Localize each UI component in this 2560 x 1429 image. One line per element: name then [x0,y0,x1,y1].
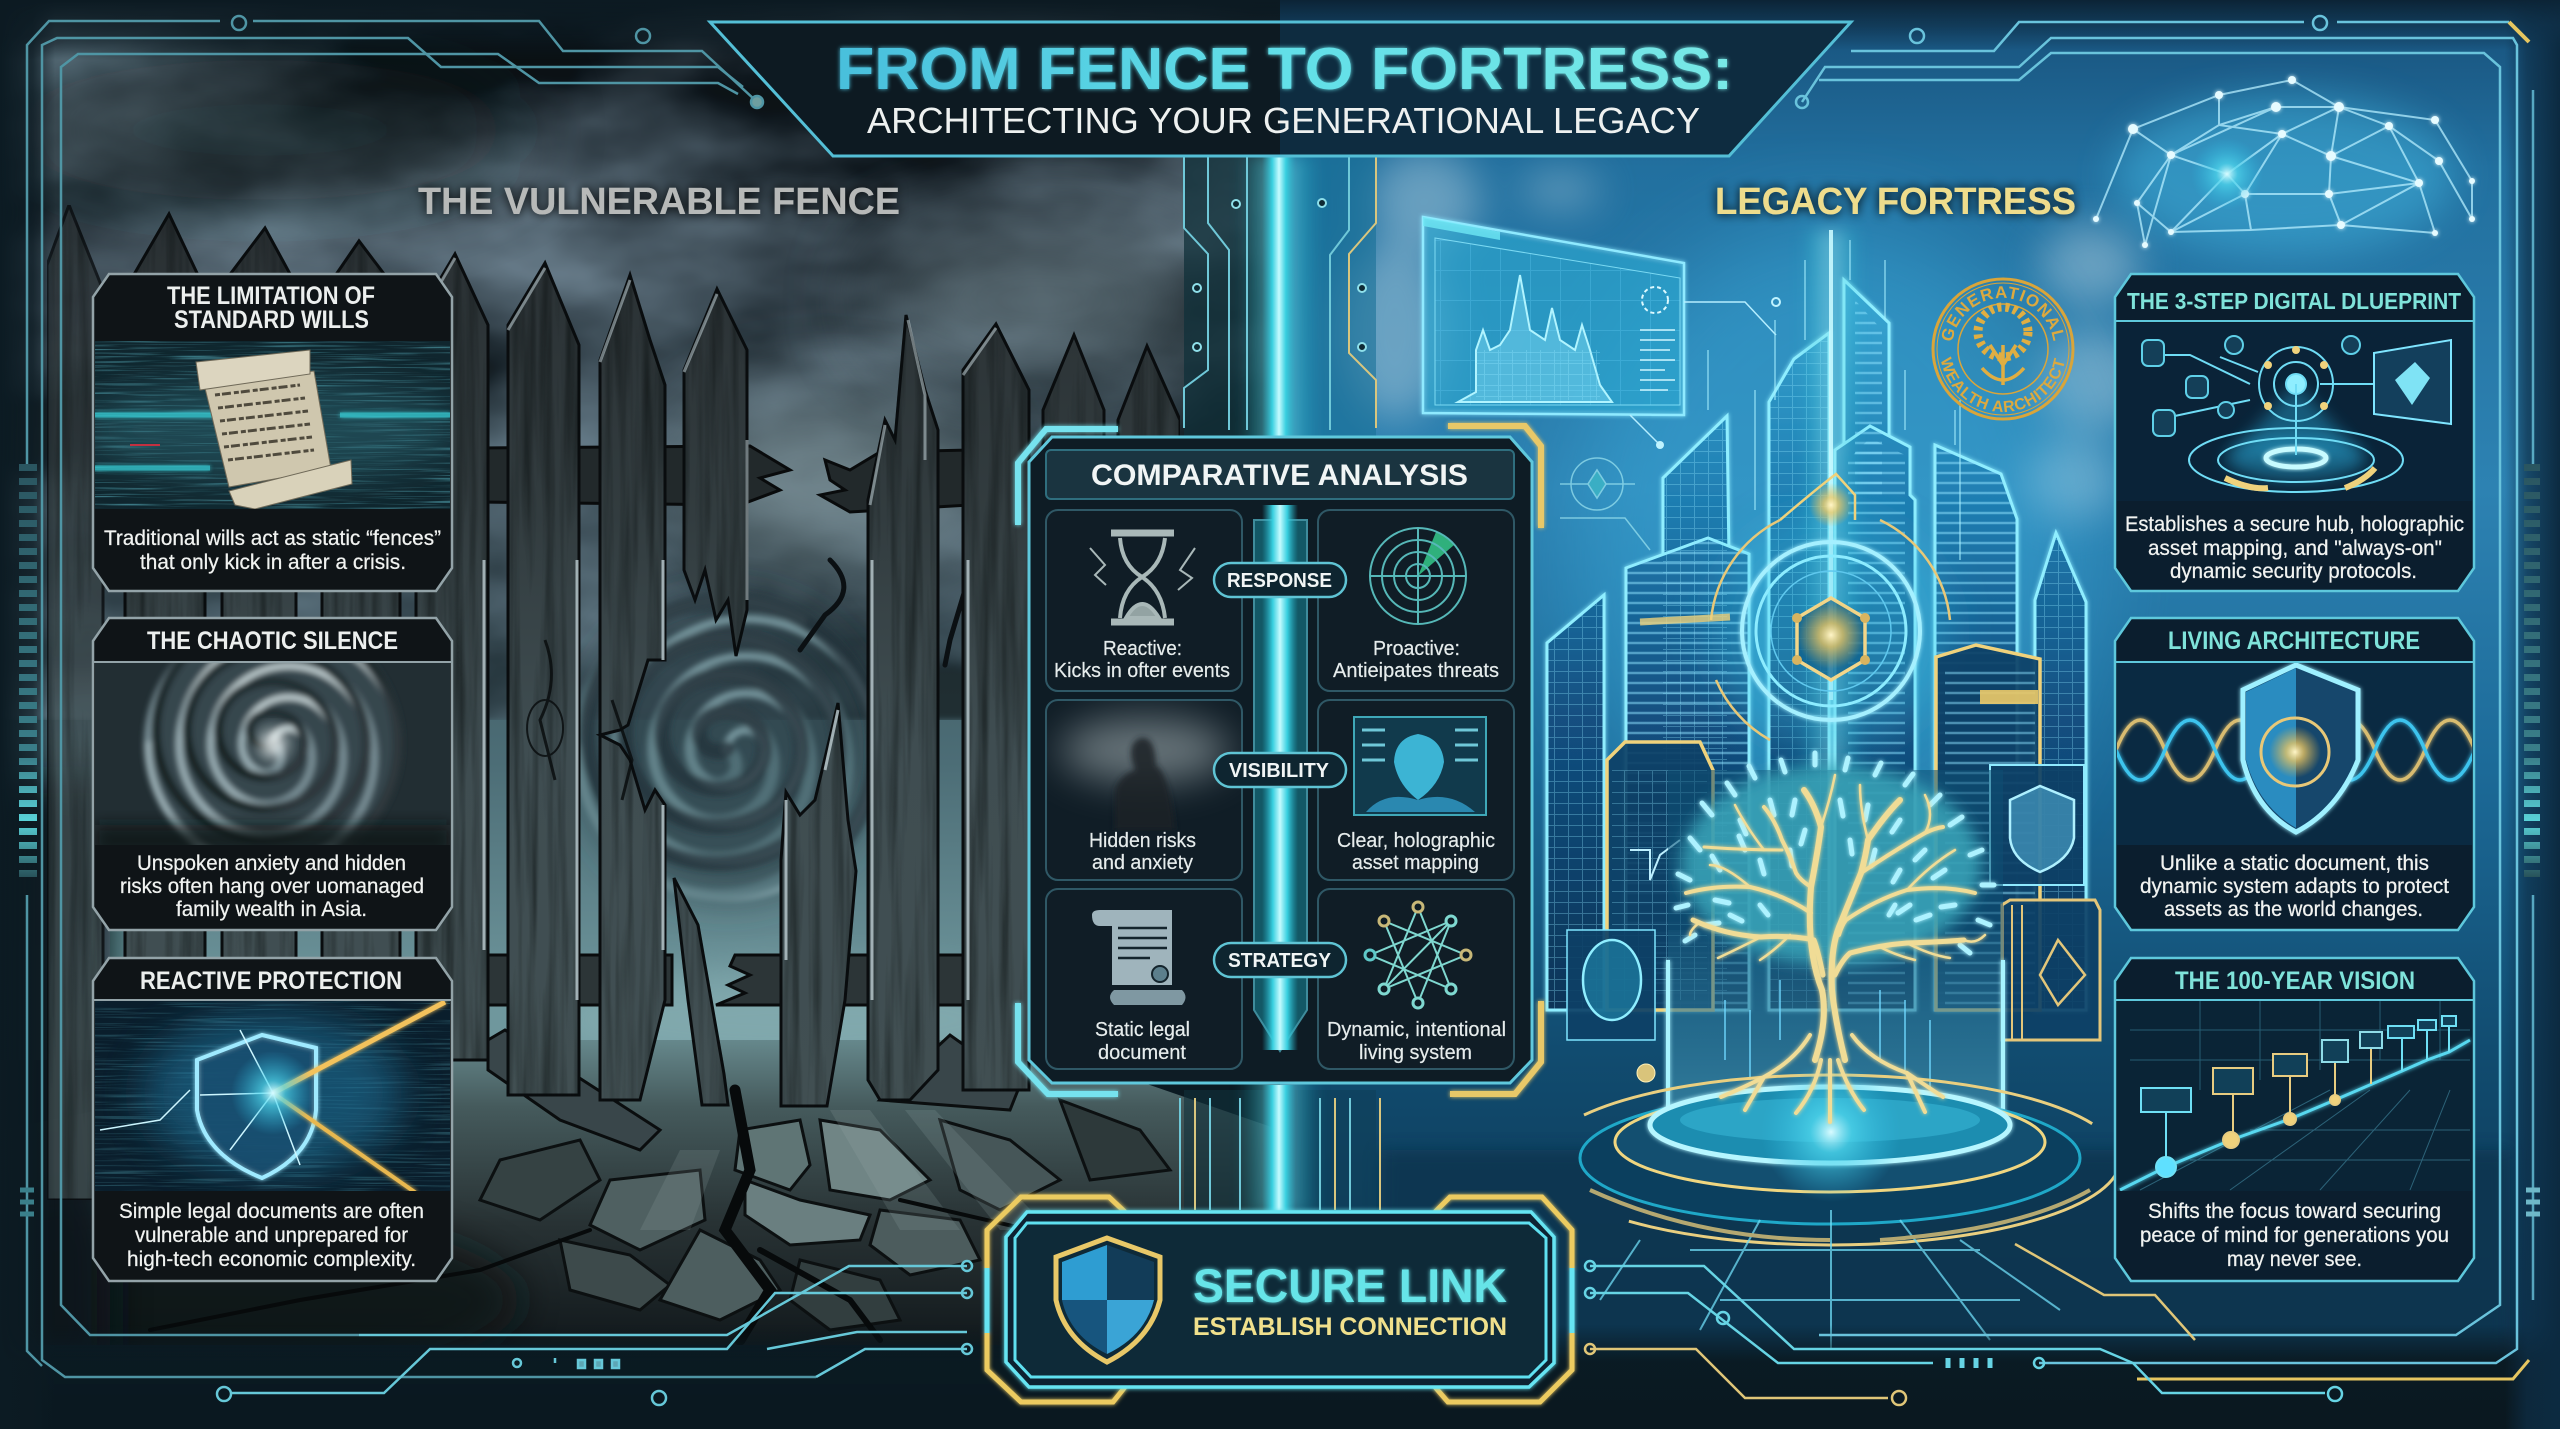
header bar [1046,450,1514,499]
cell text: document [1098,1042,1186,1064]
row 3 left: legal document [1046,889,1242,1069]
row 3 right: network [1318,889,1514,1069]
icon: holographic asset screen [1354,717,1486,815]
cell text: Reactive: [1103,638,1182,660]
card heading [167,282,375,334]
card text [120,852,424,921]
card text: vulnerable and unprepared for [135,1224,408,1247]
icon: shadow figure in fog [1060,718,1230,830]
card text: assets as the world changes. [2164,898,2423,921]
wooden fence planks [47,205,1180,1200]
swirl illustration [94,574,452,907]
icon: radar [1370,528,1466,624]
cell text [1337,830,1495,874]
dark lower floor [1380,1150,2510,1350]
card text: may never see. [2227,1248,2362,1271]
icon: quartered shield [1056,1238,1160,1362]
subtitle: ARCHITECTING YOUR GENERATIONAL LEGACY [867,100,1700,141]
cell text [1327,1019,1506,1064]
cell text: asset mapping [1352,852,1479,874]
row 1 left: hourglass reactive [1046,510,1242,691]
gold seal: Generational Wealth Architect [1932,278,2074,420]
cell text: Antieipates threats [1333,660,1499,682]
header bar: COMPARATIVE ANALYSIS [1091,459,1468,492]
storm swirl vortex [580,558,962,918]
storm sky [0,0,1280,1070]
blue sky [1280,0,2560,1400]
cracked shield illustration [94,1001,452,1193]
pill: visibility: VISIBILITY [1229,760,1330,782]
central light beam and antennas [1708,230,1960,790]
gold seal: Generational Wealth Architect: WEALTH ARCHITECT [1941,356,2064,412]
cell text [1095,1019,1190,1064]
panel: the chaotic silence [93,574,452,930]
centre divider beam [1254,505,1307,1051]
tree leaves [1676,753,1994,953]
card text [2140,852,2449,921]
golden tree [1676,753,1994,1122]
title text: FROM FENCE TO FORTRESS: [836,36,1733,102]
tree branches and roots [1686,775,1985,1122]
pill: response [1214,563,1346,597]
card text: dynamic security protocols. [2170,560,2417,583]
pill: visibility [1214,753,1346,787]
cracked ground [122,1028,1266,1345]
panel: living architecture [2115,618,2475,930]
light stripes between plank shadows [640,1110,1050,1230]
card heading: THE CHAOTIC SILENCE [147,627,398,655]
cell text: Clear, holographic [1337,830,1495,852]
card heading: STANDARD WILLS [174,306,369,334]
card text: high-tech economic complexity. [127,1248,416,1271]
cell text: and anxiety [1092,852,1193,874]
card text: asset mapping, and "always-on" [2148,537,2442,560]
panel: reactive protection [93,958,452,1281]
cell text: Dynamic, intentional [1327,1019,1506,1041]
row 1 right: radar proactive [1318,510,1514,691]
card heading: THE LIMITATION OF [167,282,375,310]
card heading: REACTIVE PROTECTION [140,967,402,995]
icon: living network [1365,902,1471,1008]
panel: the limitation of standard wills [80,274,460,591]
fence highlights and cracks [416,258,996,1000]
gold corner brackets [987,1197,1572,1402]
hologram cylinder [1668,770,2003,1120]
icon: hourglass [1090,533,1195,622]
pill: strategy: STRATEGY [1228,950,1332,972]
left frame lines [27,16,816,1377]
card text: dynamic system adapts to protect [2140,875,2449,898]
fallen plank [488,1030,660,1150]
right heading: LEGACY FORTRESS [1715,181,2076,223]
link sublabel: ESTABLISH CONNECTION [1193,1313,1507,1341]
card heading: LIVING ARCHITECTURE [2168,627,2420,655]
platform rings [1540,1062,2120,1245]
cell text [1054,638,1230,682]
icon: scroll document [1092,910,1186,1005]
card heading: THE 3-STEP DIGITAL DLUEPRINT [2127,288,2461,314]
broken fence rails [480,446,970,1005]
card text: Unlike a static document, this [2160,852,2429,875]
card text: that only kick in after a crisis. [140,551,406,574]
cell text [1333,638,1499,682]
cell text: Hidden risks [1089,830,1196,852]
panel: comparative analysis [1018,426,1541,1094]
hub hologram illustration [2116,323,2474,503]
bottom circuit traces left [217,1261,972,1405]
card text: Establishes a secure hub, holographic [2125,513,2464,536]
card text: Shifts the focus toward securing [2148,1200,2441,1223]
right frame lines [1796,16,2533,1379]
glowing hub emblem [1640,474,1951,751]
card text [119,1200,424,1271]
card text [2125,513,2464,583]
left heading: THE VULNERABLE FENCE [418,181,900,223]
row 2 left: hidden figure [1046,700,1242,880]
pill: response: RESPONSE [1227,570,1332,592]
panel: the 3-step digital blueprint [2115,274,2474,591]
card text: Unspoken anxiety and hidden [137,852,406,875]
bottom circuit traces right [1585,1244,2342,1405]
dark left edge shade [8,756,124,1242]
network dome [2093,76,2475,255]
tower window texture [1547,300,2086,1010]
shield and helix illustration [2116,663,2475,845]
central connection beam with circuit traces [1180,156,1380,1220]
sky clouds [1340,150,2145,520]
scroll over data streams [80,340,460,510]
side tick scales [20,464,2540,1214]
card text: peace of mind for generations you [2140,1224,2449,1247]
panel: the 100-year vision [2115,958,2474,1281]
floor grid [1590,1190,2090,1350]
cell text: Static legal [1095,1019,1190,1041]
gold-framed buildings and floating panels [1567,645,2100,1082]
left stormy scene: The Vulnerable Fence [0,0,1280,1390]
card text: Simple legal documents are often [119,1200,424,1223]
panel frame accents [1018,426,1541,1094]
gold seal: Generational Wealth Architect: GENERATIONAL [1942,286,2064,341]
link label: SECURE LINK [1193,1259,1507,1312]
cell text: Kicks in ofter events [1054,660,1230,682]
blue atmosphere [1570,220,2090,900]
cell text: living system [1359,1042,1472,1064]
right futuristic scene: Legacy Fortress [1280,8,2554,1356]
card text [2140,1200,2449,1271]
holographic blueprint panel [1423,217,1780,449]
pill: strategy [1214,943,1346,977]
title banner [710,22,1851,156]
cell text [1089,830,1196,874]
card text [104,527,441,574]
card text: family wealth in Asia. [176,898,367,921]
card text: Traditional wills act as static “fences” [104,527,441,550]
row 2 right: holographic screen [1318,700,1514,880]
timeline illustration [2116,1001,2474,1191]
card heading: THE 100-YEAR VISION [2175,967,2415,995]
card text: risks often hang over uomanaged [120,875,424,898]
cell text: Proactive: [1373,638,1460,660]
right-side reticle [1560,458,1650,550]
city skyline towers [1547,280,2086,1010]
call to action: secure link [987,1197,1572,1402]
